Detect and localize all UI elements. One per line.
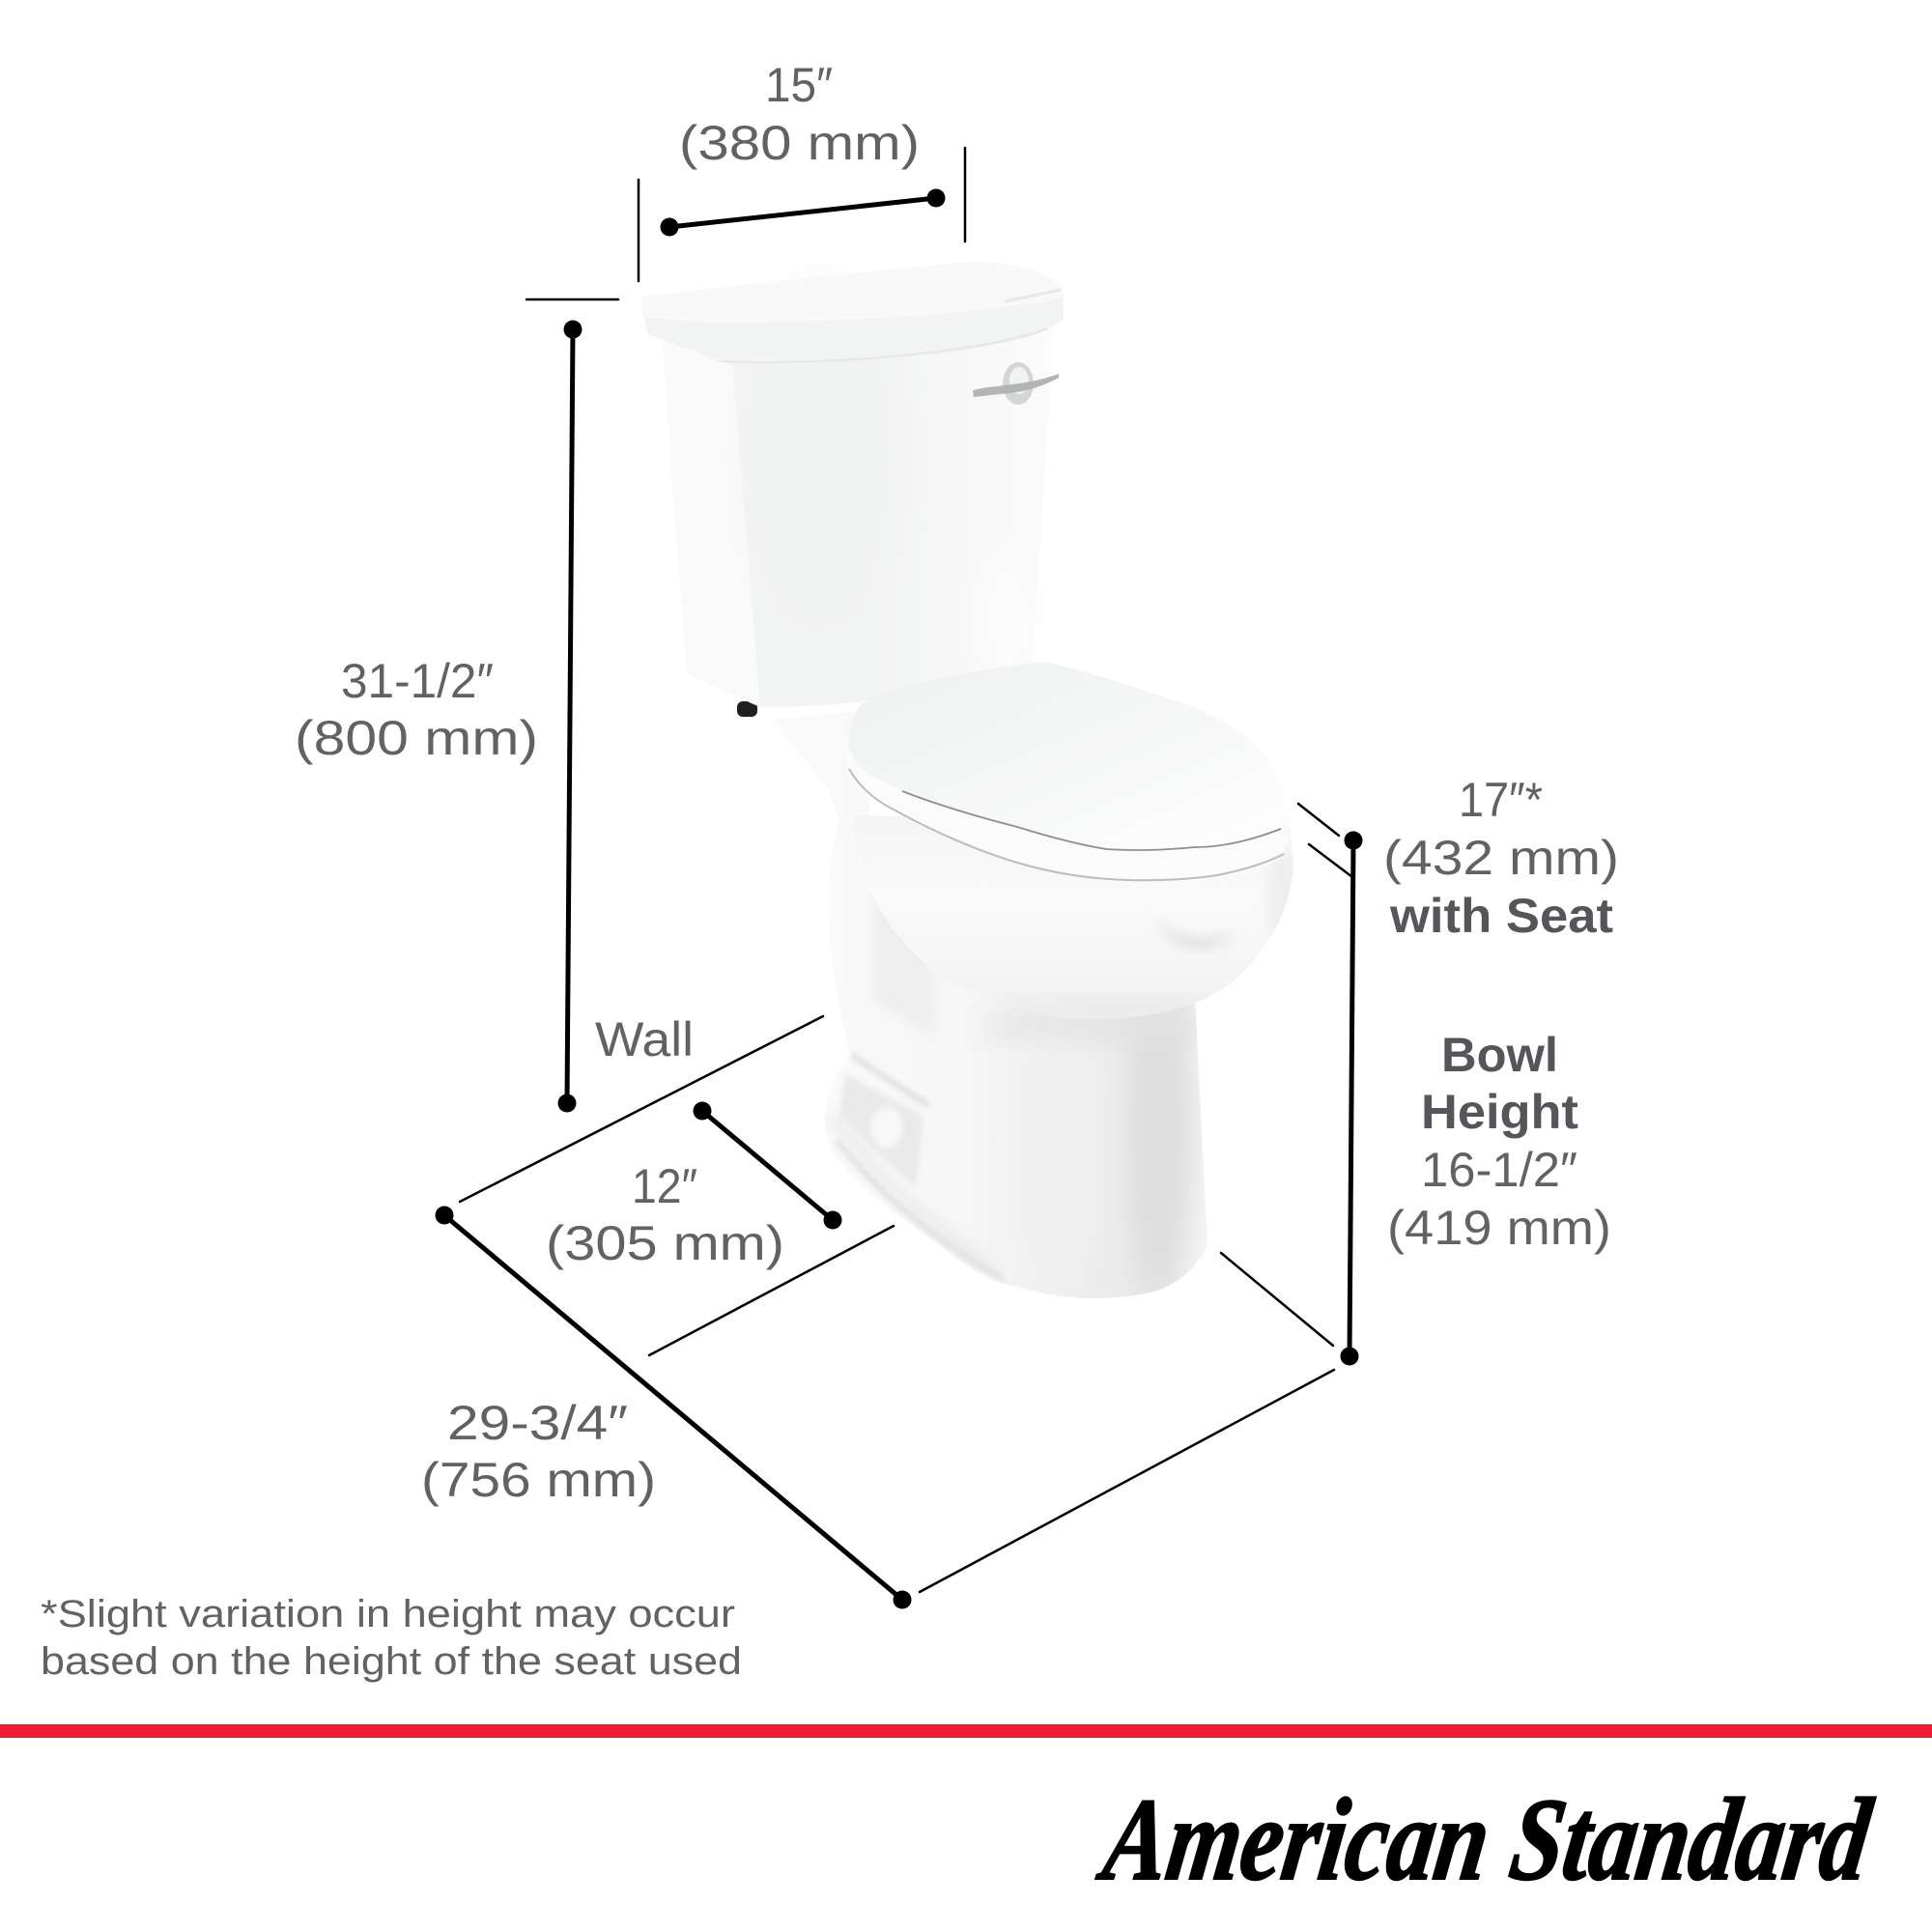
dimension: overall height line xyxy=(526,299,618,1113)
label: overall height xyxy=(295,654,538,765)
footnote xyxy=(41,1593,742,1683)
toilet: tank lid xyxy=(640,262,1064,362)
footnote: based on the height of the seat used xyxy=(41,1640,742,1683)
toilet product illustration xyxy=(640,262,1302,1304)
toilet: seat gap line xyxy=(902,791,1281,850)
label: overall depth: (756 mm) xyxy=(421,1453,656,1507)
label: height with seat: (432 mm) xyxy=(1383,831,1619,885)
label: bowl height: Bowl xyxy=(1441,1028,1558,1082)
toilet: rear drain nut xyxy=(737,701,757,717)
toilet: bowl xyxy=(853,815,1302,1022)
label: rough-in xyxy=(546,1159,784,1270)
label: height with seat: with Seat xyxy=(1389,889,1613,943)
label: overall height: 31-1/2″ xyxy=(341,654,494,708)
dimension: rough-in lines xyxy=(460,1016,894,1355)
label: height with seat xyxy=(1383,773,1619,943)
red divider bar xyxy=(0,1724,1932,1738)
label: tank width xyxy=(679,58,920,170)
dimension: overall depth line xyxy=(435,1206,1334,1609)
dimension: tank width line xyxy=(639,148,965,281)
label: overall depth xyxy=(421,1396,656,1507)
label: wall: Wall xyxy=(595,1012,694,1066)
toilet: tank body xyxy=(663,290,1053,707)
icon: chrome flush handle xyxy=(973,362,1059,405)
label: bowl height: (419 mm) xyxy=(1387,1201,1611,1255)
footnote: *Slight variation in height may occur xyxy=(41,1593,735,1635)
label: rough-in: 12″ xyxy=(632,1159,697,1213)
label: rough-in: (305 mm) xyxy=(546,1216,784,1270)
label: height with seat: 17″* xyxy=(1459,773,1543,827)
icon: floor bolt cap xyxy=(870,1107,903,1148)
label: tank width: 15″ xyxy=(765,58,833,112)
label: bowl height xyxy=(1387,1028,1611,1255)
label: overall height: (800 mm) xyxy=(295,711,538,765)
label: tank width: (380 mm) xyxy=(679,116,920,170)
toilet: pedestal and trapway xyxy=(826,893,1208,1298)
dimension: bowl height line xyxy=(1221,804,1362,1366)
toilet: seat ring under-shadow xyxy=(849,769,1284,880)
toilet: seat ring xyxy=(846,734,1290,881)
label: overall depth: 29-3/4″ xyxy=(447,1396,628,1450)
toilet: seat lid xyxy=(848,662,1286,850)
label: bowl height: Height xyxy=(1421,1085,1578,1139)
label: bowl height: 16-1/2″ xyxy=(1421,1143,1577,1197)
